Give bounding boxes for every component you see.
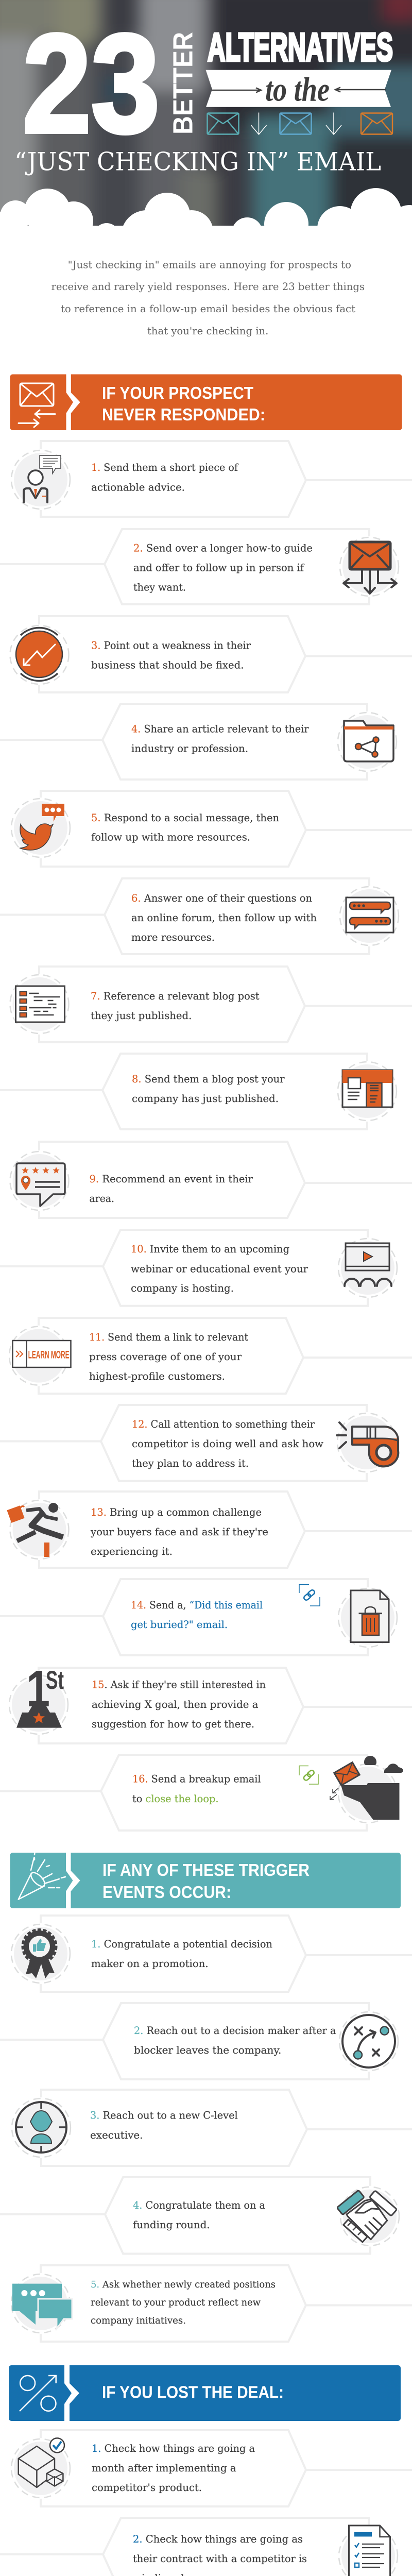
item text: blocker leaves the company. [134, 2044, 281, 2056]
item text: 15. Ask if they're still interested in [92, 1679, 266, 1691]
item text: maker on a promotion. [91, 1957, 209, 1970]
icon: learn more button: LEARN MORE [28, 1349, 70, 1361]
icon: envelope with arrows [19, 383, 55, 427]
icon: product cubes with check [19, 2438, 64, 2487]
item text: industry or profession. [131, 742, 248, 755]
icon: chat window [346, 897, 393, 933]
heading text: EVENTS OCCUR: [102, 1883, 231, 1902]
item text: experiencing it. [91, 1545, 173, 1557]
item text [91, 1938, 272, 1970]
panel: item 1 [10, 441, 412, 517]
intro paragraph [52, 258, 365, 337]
item text [131, 722, 309, 755]
panel: trigger 2 [0, 2003, 399, 2079]
item text: 1. Check how things are going a [92, 2442, 255, 2454]
panel: item 8 [0, 1054, 398, 1129]
item text: they want. [133, 581, 186, 593]
icon: party popper [19, 1850, 65, 1900]
panel: trigger 5 [10, 2265, 412, 2342]
item text: webinar or educational event your [131, 1262, 308, 1275]
panel: item 2 [0, 529, 400, 604]
item text: 1. Congratulate a potential decision [91, 1938, 272, 1950]
panel: item 13 [7, 1492, 412, 1568]
section header: trigger events [10, 1850, 401, 1909]
heading text: IF YOUR PROSPECT [102, 384, 254, 403]
panel: trigger 1 [10, 1916, 412, 1992]
item text: they just published. [91, 1009, 192, 1022]
item text: 13. Bring up a common challenge [91, 1506, 262, 1518]
item text [131, 1243, 308, 1294]
item text: competitor is doing well and ask how [132, 1437, 323, 1450]
heading text: IF YOU LOST THE DEAL: [102, 2383, 284, 2402]
icon: handshake [337, 2190, 397, 2242]
icon: person with speech bubble [24, 455, 61, 502]
intro paragraph: to reference in a follow-up email besides the obvious fact [61, 302, 355, 315]
item text: their contract with a competitor is [133, 2552, 307, 2565]
item text: business that should be fixed. [91, 658, 244, 671]
item text [132, 1418, 323, 1469]
item text: 9. Recommend an event in their [90, 1173, 253, 1185]
item text: competitor's product. [92, 2481, 202, 2494]
icon: blog web page [342, 1070, 392, 1107]
intro paragraph: "Just checking in" emails are annoying for prospects to [68, 258, 351, 270]
item text: 2. Send over a longer how-to guide [133, 541, 313, 554]
item text: executive. [90, 2129, 143, 2141]
item text: funding round. [133, 2218, 210, 2231]
title line: just checking in email: “JUST CHECKING IN” EMAIL [14, 147, 381, 177]
item text: area. [90, 1192, 114, 1205]
panel: trigger 3 [11, 2090, 412, 2166]
icon: blog post list [15, 986, 65, 1022]
section header: never responded [10, 374, 402, 431]
item text: 10. Invite them to an upcoming [131, 1243, 289, 1255]
item text: to close the loop. [132, 1792, 218, 1805]
item text: company has just published. [132, 1092, 279, 1105]
item text [91, 2280, 276, 2326]
section header: lost the deal [9, 2365, 401, 2421]
ribbon: to the: to the [265, 71, 330, 108]
icon: award rosette with thumb [23, 1930, 56, 1978]
item text [134, 2024, 336, 2056]
item text: company is hosting. [131, 1282, 234, 1294]
title number 23: 23 [23, 5, 160, 162]
item text: month after implementing a [92, 2462, 236, 2474]
item text: 3. Point out a weakness in their [91, 639, 251, 652]
item text: 4. Share an article relevant to their [131, 722, 309, 735]
cloud divider [0, 188, 412, 262]
item text [133, 2199, 265, 2231]
heading text [102, 1861, 310, 1902]
hero background [0, 0, 412, 239]
intro paragraph: that you're checking in. [147, 325, 268, 337]
item text: they plan to address it. [132, 1457, 249, 1469]
panel: item 16 [0, 1755, 403, 1831]
panel: item 14 [0, 1579, 398, 1655]
item text: 5. Respond to a social message, then [91, 811, 279, 824]
icon: first place podium: St [46, 1666, 64, 1694]
item text [131, 1599, 263, 1631]
title [14, 5, 393, 177]
icon: target on person [16, 2102, 66, 2153]
item text: 8. Send them a blog post your [132, 1073, 285, 1085]
item text [132, 1773, 261, 1805]
icon: whistle [337, 1422, 398, 1466]
icon: learn more button [12, 1341, 71, 1367]
panel: item 5 [10, 791, 412, 867]
item text [91, 639, 251, 671]
icon: bird with speech bubble [20, 804, 64, 850]
item text: an online forum, then follow up with [131, 911, 317, 924]
item text: get buried?" email. [131, 1618, 228, 1631]
icon: first place podium [16, 1660, 64, 1728]
panel: item 7 [9, 967, 412, 1042]
icon: percent with arrow [20, 2376, 56, 2411]
item text [89, 1331, 248, 1382]
icon: document with trash [351, 1590, 389, 1642]
item text [133, 2533, 307, 2576]
item text [90, 1506, 268, 1557]
item text: suggestion for how to get there. [92, 1718, 254, 1730]
item text: company initiatives. [91, 2316, 186, 2326]
icon: envelope forwarding arrows [344, 542, 397, 594]
icon row: envelopes and arrows [207, 112, 392, 134]
panel: item 15 [8, 1660, 412, 1743]
icon: envelope falling off cliff [330, 1756, 403, 1820]
item text: highest-profile customers. [89, 1370, 225, 1382]
panel: item 11 [8, 1318, 412, 1394]
item text: 4. Congratulate them on a [133, 2199, 265, 2211]
item text: achieving X goal, then provide a [92, 1698, 259, 1710]
panel: deal 1 [10, 2430, 412, 2506]
item text: relevant to your product reflect new [91, 2298, 261, 2308]
item text: 7. Reference a relevant blog post [91, 990, 260, 1002]
item text: 16. Send a breakup email [132, 1773, 261, 1785]
item text [92, 2442, 255, 2494]
item text: 5. Ask whether newly created positions [91, 2280, 276, 2290]
item text [91, 461, 239, 494]
icon: folder with share nodes [344, 721, 393, 761]
icon: checklist document [349, 2526, 390, 2576]
item text [90, 1173, 253, 1205]
panel: item 9 [9, 1142, 412, 1218]
item text: 3. Reach out to a new C-level [90, 2109, 238, 2122]
icon: blue link [299, 1585, 320, 1606]
title word BETTER: BETTER [168, 32, 199, 134]
item text: and offer to follow up in person if [133, 562, 305, 574]
panel: item 6 [0, 878, 400, 954]
panel: item 10 [0, 1230, 398, 1306]
icon: two chat bubbles [12, 2284, 72, 2329]
icon: webinar screen [345, 1243, 391, 1286]
item text: your buyers face and ask if they're [90, 1526, 268, 1538]
item text: press coverage of one of your [89, 1350, 242, 1363]
item text: more resources. [131, 931, 215, 943]
item text: 2. Reach out to a decision maker after a [134, 2024, 336, 2037]
panel: item 4 [0, 704, 398, 779]
icon: review speech bubble [16, 1163, 65, 1206]
item text [132, 1073, 285, 1105]
item text [91, 990, 260, 1022]
item text: 11. Send them a link to relevant [89, 1331, 248, 1343]
item text [91, 811, 279, 843]
heading text [102, 384, 265, 425]
item text [92, 1679, 266, 1730]
icon: strategy play diagram [342, 2015, 395, 2067]
item text: 2. Check how things are going as [133, 2533, 303, 2545]
item text: 12. Call attention to something their [132, 1418, 315, 1430]
item text [131, 892, 317, 943]
item text [90, 2109, 238, 2141]
intro paragraph: receive and rarely yield responses. Here are 23 better things [52, 280, 365, 293]
panel: item 12 [0, 1405, 398, 1481]
ribbon: to the [206, 70, 391, 108]
item text: actionable advice. [91, 481, 185, 494]
icon: declining chart [16, 628, 62, 681]
heading text: NEVER RESPONDED: [102, 405, 265, 425]
panel: deal 2 [0, 2518, 399, 2576]
icon: green link [299, 1766, 318, 1784]
icon: first place podium: 1 [26, 1660, 50, 1718]
item text: 1. Send them a short piece of [91, 461, 239, 473]
item text [133, 541, 313, 593]
panel: trigger 4 [0, 2177, 400, 2253]
heading text: IF ANY OF THESE TRIGGER [102, 1861, 310, 1880]
icon: runner jumping hurdle [7, 1503, 63, 1557]
panel: item 3 [9, 616, 412, 692]
item text: 6. Answer one of their questions on [131, 892, 312, 904]
item text: follow up with more resources. [91, 831, 250, 843]
item text: 14. Send a, “Did this email [131, 1599, 263, 1611]
